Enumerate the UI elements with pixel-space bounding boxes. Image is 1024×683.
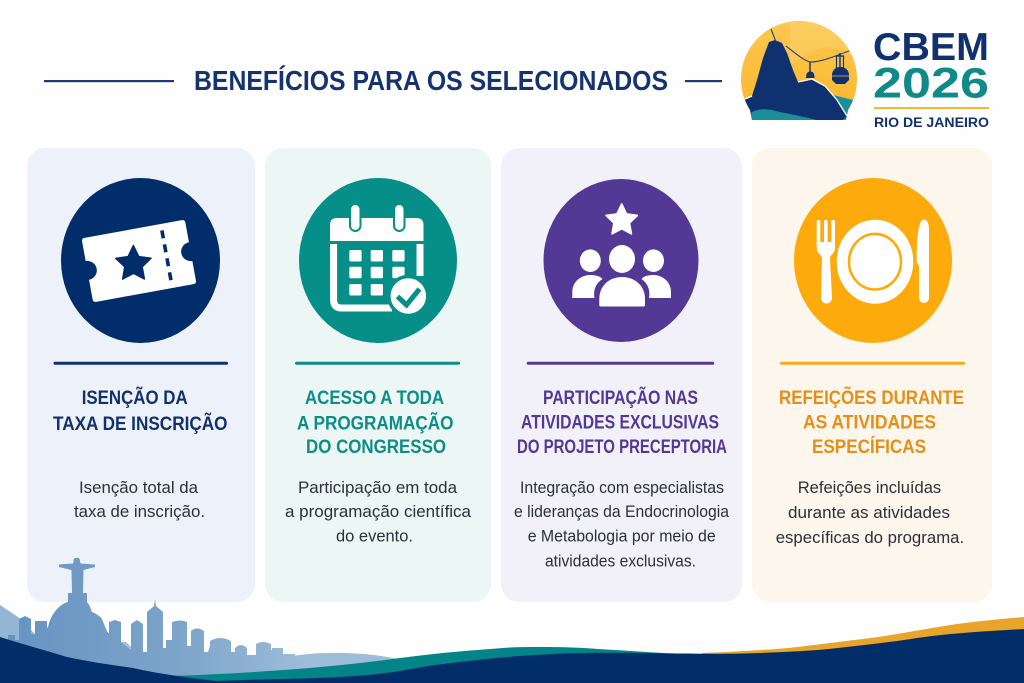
panel: isenção da taxa [27, 148, 255, 602]
heading: PARTICIPAÇÃO NAS [543, 386, 698, 409]
heading: ATIVIDADES EXCLUSIVAS [521, 412, 719, 434]
heading: ISENÇÃO DA [82, 386, 188, 409]
heading: ACESSO A TODA [305, 387, 444, 409]
heading: DO CONGRESSO [306, 436, 446, 458]
icon: calendar with check [299, 178, 457, 343]
description [776, 478, 964, 547]
description: durante as atividades [788, 503, 950, 522]
description: taxa de inscrição. [74, 502, 205, 521]
heading: AS ATIVIDADES [803, 412, 936, 434]
heading: ESPECÍFICAS [812, 435, 926, 458]
description: atividades exclusivas. [545, 552, 696, 570]
icon: ticket with star [61, 178, 220, 343]
description [74, 478, 205, 521]
logo wordmark: CBEM [873, 26, 989, 69]
heading [297, 387, 454, 458]
description: e Metabologia por meio de [528, 526, 716, 546]
description: a programação científica [285, 502, 472, 521]
description [285, 478, 472, 546]
heading: A PROGRAMAÇÃO [297, 412, 454, 434]
description: específicas do programa. [776, 528, 964, 547]
title: BENEFÍCIOS PARA OS SELECIONADOS [194, 65, 668, 96]
description: Isenção total da [79, 478, 199, 497]
logo: CBEM 2026 Rio de Janeiro: 2026 [873, 60, 989, 108]
description [514, 478, 729, 570]
description: Integração com especialistas [520, 478, 724, 497]
description: Refeições incluídas [798, 478, 941, 497]
panel: atividades exclusivas [501, 148, 742, 602]
icon: people with star [544, 179, 698, 342]
panel: acesso à programação [265, 148, 491, 602]
description: Participação em toda [298, 478, 458, 497]
heading [779, 385, 964, 458]
panel: refeições [752, 148, 992, 602]
heading [517, 386, 727, 458]
skyline: Rio with Christ the Redeemer [0, 558, 402, 683]
icon: plate with fork and knife [794, 178, 952, 343]
description: e lideranças da Endocrinologia [514, 502, 729, 521]
logo emblem: Sugarloaf and cable car [740, 20, 858, 121]
heading: DO PROJETO PRECEPTORIA [517, 436, 727, 458]
description: do evento. [336, 526, 413, 546]
heading: TAXA DE INSCRIÇÃO [53, 412, 228, 435]
footer waves [0, 617, 1024, 683]
heading [53, 386, 228, 435]
heading: REFEIÇÕES DURANTE [779, 385, 964, 409]
logo: CBEM 2026 Rio de Janeiro [740, 20, 989, 130]
logo: CBEM 2026 Rio de Janeiro: RIO DE JANEIRO [874, 115, 989, 130]
